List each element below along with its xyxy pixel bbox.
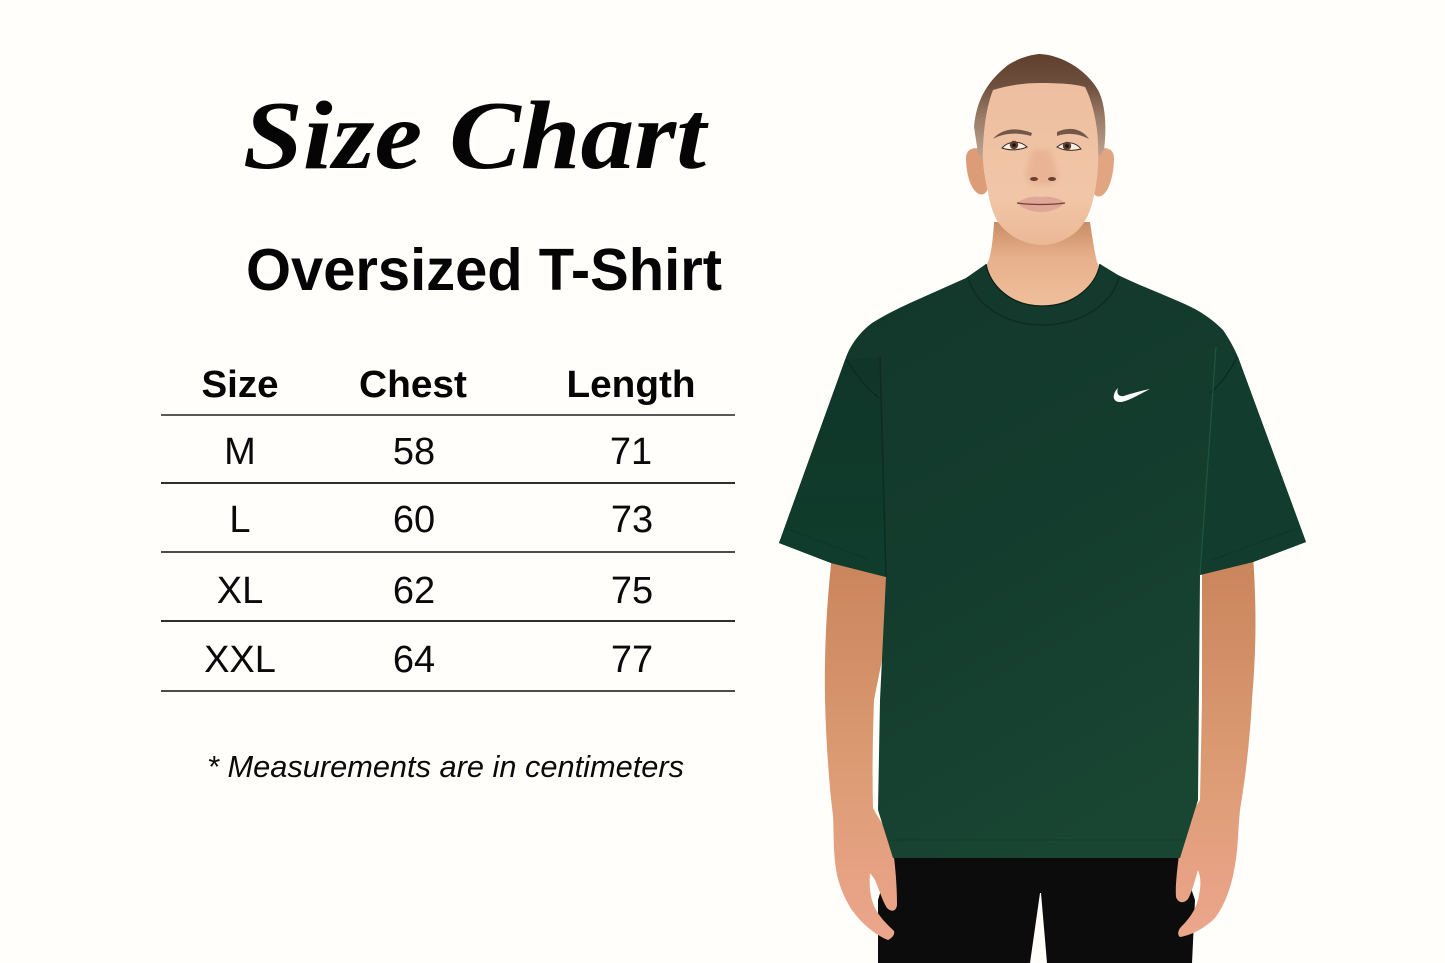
right arm and hand <box>1176 555 1256 937</box>
eyes <box>1002 141 1081 150</box>
row: XXL: 77 <box>611 639 653 681</box>
table header: Size <box>202 364 278 406</box>
row: XL: 62 <box>393 570 435 612</box>
nose <box>1026 150 1058 185</box>
row: M: M <box>224 431 256 473</box>
black shorts <box>878 850 1195 963</box>
row: XL: XL <box>217 570 263 612</box>
size table <box>161 364 735 691</box>
table header: Length <box>566 364 696 406</box>
mouth <box>1017 197 1065 212</box>
row: XL: 75 <box>611 570 653 612</box>
row: XXL: XXL <box>204 639 276 681</box>
sleeve seams <box>847 357 1237 577</box>
swoosh logo <box>1114 388 1150 402</box>
table header <box>202 364 696 406</box>
title: Size Chart <box>243 82 709 189</box>
right sleeve shade <box>1200 347 1306 575</box>
collar ribbing <box>968 277 1119 325</box>
footnote: * Measurements are in centimeters <box>207 749 684 784</box>
t-shirt body and sleeves <box>779 264 1306 858</box>
face <box>983 83 1098 245</box>
row: L: L <box>229 499 251 541</box>
row: M <box>224 431 652 473</box>
table header: Chest <box>359 364 467 406</box>
row: XL <box>217 570 653 612</box>
row: XXL <box>204 639 653 681</box>
sleeve hem stitches <box>785 528 1298 560</box>
left arm and hand <box>825 555 897 940</box>
hair <box>974 54 1105 160</box>
right ear <box>1092 148 1114 197</box>
left ear <box>966 148 988 195</box>
eyebrows <box>993 129 1089 139</box>
neckline edge <box>986 264 1100 306</box>
bottom hem stitch <box>892 839 1183 841</box>
left sleeve shade <box>779 357 886 577</box>
row: L: 73 <box>611 499 653 541</box>
neck <box>984 222 1101 310</box>
row: XXL: 64 <box>393 639 435 681</box>
right body seam highlight <box>1200 347 1216 575</box>
model wearing t-shirt <box>779 54 1306 963</box>
row: L <box>229 499 653 541</box>
row: M: 71 <box>610 431 652 473</box>
subtitle: Oversized T-Shirt <box>246 237 722 303</box>
row: M: 58 <box>393 431 435 473</box>
row: L: 60 <box>393 499 435 541</box>
